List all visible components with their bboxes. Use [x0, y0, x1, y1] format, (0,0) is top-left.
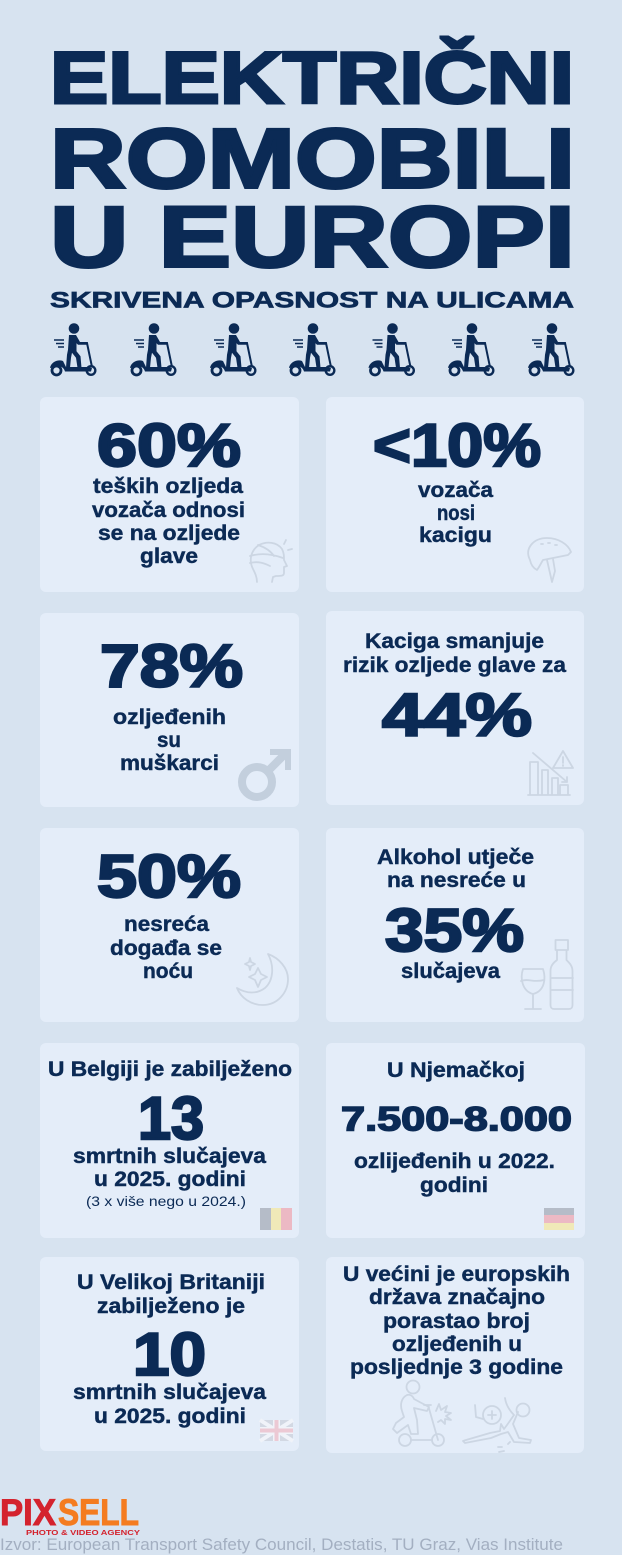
panel: alcohol 35%: na nesreće u	[387, 869, 526, 892]
panel: 60% head injuries: vozača odnosi	[92, 499, 245, 522]
icon: wine glass and bottle	[521, 940, 573, 1009]
panel: most European countries	[326, 1257, 584, 1453]
panel: 50% at night: događa se	[110, 937, 222, 960]
panel: United Kingdom	[40, 1257, 299, 1451]
panel: 60% head injuries	[40, 397, 299, 592]
panel: under 10% wear helmet	[326, 397, 584, 592]
panel: most European countries: ozljeđenih u	[392, 1333, 522, 1356]
panel: under 10% wear helmet: nosi	[437, 502, 475, 525]
logo: PIXSELL	[0, 1492, 140, 1537]
panel: Belgium: U Belgiji je zabilježeno	[48, 1058, 292, 1081]
panel: Belgium: u 2025. godini	[94, 1168, 246, 1191]
panel: 50% at night	[40, 828, 299, 1022]
panel: 78% men: ozljeđenih	[113, 706, 226, 729]
subtitle: SKRIVENA OPASNOST NA ULICAMA	[50, 288, 574, 312]
panel: 60% head injuries: glave	[140, 545, 198, 568]
panel: 78% men: su	[157, 729, 181, 752]
icon: rider hitting obstacle	[393, 1380, 451, 1446]
panel: Belgium: (3 x više nego u 2024.)	[86, 1193, 246, 1209]
logo: PIXSELL: PHOTO & VIDEO AGENCY	[26, 1528, 140, 1537]
panel: alcohol 35%: Alkohol utječe	[377, 846, 534, 869]
icon row: scooter riders	[50, 323, 573, 375]
panel: 60% head injuries: teških ozljeda	[93, 475, 243, 498]
title: ROMOBILI	[50, 112, 575, 206]
panel: most European countries: U većini je europskih	[343, 1263, 570, 1286]
icon: head with bandage	[250, 540, 292, 582]
panel: Germany: 7.500-8.000	[341, 1100, 572, 1138]
panel: Belgium	[40, 1043, 299, 1238]
panel: Germany: ozlijeđenih u 2022.	[354, 1150, 555, 1173]
panel: alcohol 35%	[326, 828, 584, 1022]
icon: male symbol	[242, 749, 291, 797]
panel: helmet reduces risk 44%	[326, 611, 584, 805]
icon: injured person falling	[463, 1398, 531, 1452]
panel: under 10% wear helmet: vozača	[418, 479, 493, 502]
panel: Belgium: 13	[138, 1085, 204, 1152]
panel: 60% head injuries: se na ozljede	[98, 522, 240, 545]
title: U EUROPI	[50, 190, 575, 286]
logo: PIXSELL: PIX	[0, 1492, 56, 1533]
panel: under 10% wear helmet: kacigu	[419, 524, 492, 547]
panel: helmet reduces risk 44%: rizik ozljede glave za	[343, 654, 566, 677]
panel: helmet reduces risk 44%: Kaciga smanjuje	[365, 630, 544, 653]
icon: UK flag	[260, 1420, 293, 1441]
logo: PIXSELL: SELL	[58, 1492, 139, 1533]
panel: most European countries: posljednje 3 godine	[350, 1356, 563, 1379]
panel: United Kingdom: zabilježeno je	[97, 1295, 245, 1318]
panel: 78% men: 78%	[100, 632, 243, 700]
panel: Germany: godini	[420, 1174, 488, 1197]
panel: United Kingdom: U Velikoj Britaniji	[77, 1271, 265, 1294]
panel: alcohol 35%: 35%	[385, 897, 524, 964]
icon: German flag	[544, 1208, 574, 1230]
source line: Izvor: European Transport Safety Council, Destatis, TU Graz, Vias Institute	[0, 1535, 563, 1554]
title: ELEKTRIČNI	[50, 36, 574, 119]
panel: United Kingdom: smrtnih slučajeva	[73, 1381, 266, 1404]
panel: Germany	[326, 1043, 585, 1238]
panel: 50% at night: noću	[143, 960, 193, 983]
icon: falling chart with warning	[528, 751, 573, 795]
panel: most European countries: država značajno	[369, 1286, 545, 1309]
panel: 50% at night: nesreća	[124, 913, 209, 936]
icon: helmet	[528, 538, 571, 582]
icon: Belgian flag	[260, 1208, 292, 1230]
panel: alcohol 35%: slučajeva	[401, 960, 500, 983]
panel: United Kingdom: u 2025. godini	[94, 1405, 246, 1428]
icon: moon and stars	[237, 954, 288, 1005]
panel: 78% men	[40, 613, 299, 807]
panel: Belgium: smrtnih slučajeva	[73, 1145, 266, 1168]
panel: 50% at night: 50%	[97, 843, 241, 910]
panel: under 10% wear helmet: <10%	[373, 412, 541, 479]
panel: Germany: U Njemačkoj	[387, 1059, 525, 1082]
panel: helmet reduces risk 44%: 44%	[382, 682, 532, 748]
panel: United Kingdom: 10	[133, 1321, 206, 1388]
panel: most European countries: porastao broj	[383, 1310, 530, 1333]
title	[50, 36, 575, 286]
panel: 78% men: muškarci	[120, 752, 219, 775]
panel: 60% head injuries: 60%	[97, 412, 241, 479]
